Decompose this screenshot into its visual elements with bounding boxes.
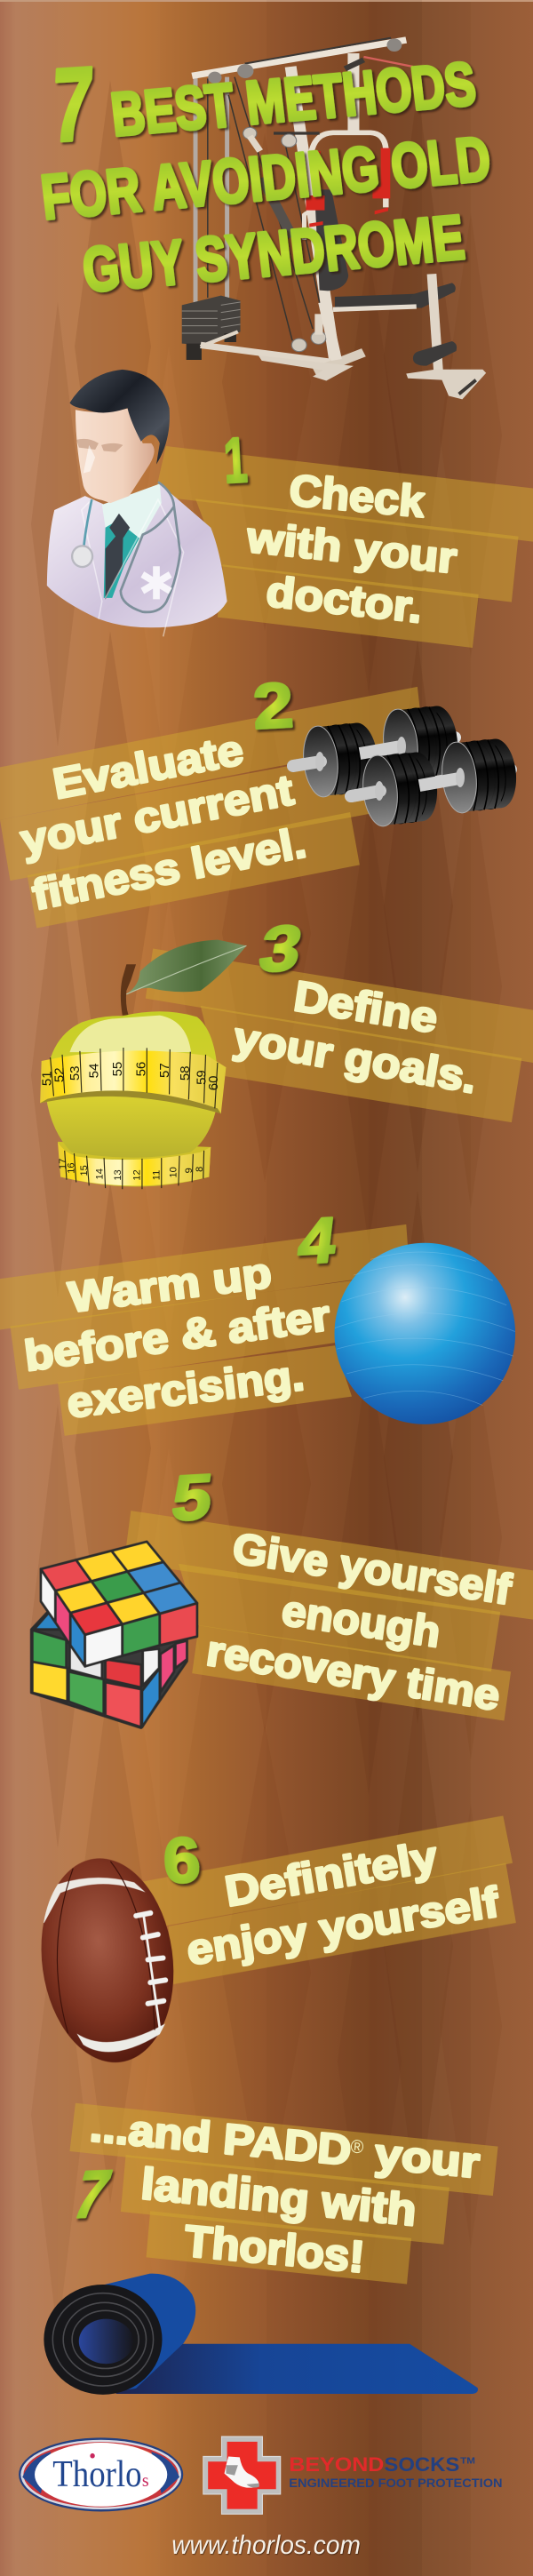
logo text: Beyond Socks: ENGINEERED FOOT PROTECTION [289,2476,503,2490]
step 4: warm up before and after exercising [0,1203,515,1436]
icon: apple with tape measure: 9 [184,1168,195,1173]
text: Evaluate your current fitness level: your current [17,766,298,865]
number 6: 6 [162,1824,202,1896]
icon: apple with tape measure: 54 [88,1064,102,1078]
logo text: Beyond Socks: SOCKS [384,2454,459,2476]
text: Define your goals: Define [290,972,441,1042]
logo: Thorlos [19,2437,183,2511]
text: and PADD your landing with Thorlos [88,2102,481,2282]
banner stripes [69,2103,498,2285]
text: Definitely enjoy yourself: Definitely [222,1832,442,1916]
number 3: 3 [254,913,307,985]
icon: apple with tape measure: 55 [111,1062,125,1076]
icon: dumbbells [293,704,520,828]
step 3: define your goals [40,913,533,1189]
icon: apple with tape measure: 57 [158,1063,172,1078]
text: Define your goals [230,972,480,1103]
number 2: 2 [251,670,295,742]
icon: apple with tape measure: 60 [207,1076,221,1090]
icon: apple with tape measure: 16 [67,1162,76,1174]
text: Check with your doctor: with your [244,514,458,583]
icon: apple with tape measure: 58 [179,1065,193,1081]
logo text: Beyond Socks: BEYOND [289,2454,384,2476]
icon: apple with tape measure: 11 [152,1170,162,1180]
icon: doctor [47,370,227,636]
icon: apple with tape measure: 8 [195,1167,205,1172]
icon: exercise ball [335,1243,515,1424]
banner stripes [155,446,533,648]
text: Check with your doctor [244,467,458,633]
number 7: 7 [66,2157,118,2232]
text: and PADD your landing with Thorlos: ...and PADD [88,2102,353,2174]
text: Evaluate your current fitness level: Evaluate [50,726,247,809]
text: and PADD your landing with Thorlos: Thorlos! [183,2216,366,2282]
text: Warm up before and after exercising: Warm up [66,1249,274,1322]
icon: rubiks cube [31,1542,197,1727]
text: Definitely enjoy yourself [184,1832,502,1974]
icon: apple with tape measure: 56 [135,1062,148,1076]
icon: apple with tape measure: 10 [169,1167,179,1177]
icon: apple with tape measure: 12 [131,1169,142,1181]
icon: apple with tape measure: 15 [79,1165,90,1176]
text: Definitely enjoy yourself: enjoy yourself [184,1878,502,1974]
footer logos [19,2436,503,2560]
icon: apple with tape measure: 14 [95,1168,106,1179]
title [37,44,494,305]
icon: apple with tape measure: 13 [113,1169,123,1181]
text: Check with your doctor: Check [288,467,427,527]
icon: rolled yoga mat [44,2274,478,2395]
icon: apple with tape measure [40,940,246,1189]
icon: apple with tape measure: 51 [41,1071,54,1086]
logo text: Beyond Socks [289,2454,503,2490]
icon: apple with tape measure: 17 [58,1159,68,1169]
number 1: 1 [222,425,249,496]
text: Warm up before and after exercising: exercising. [65,1352,306,1427]
text: and PADD your landing with Thorlos: your [373,2130,481,2187]
logo: Beyond Socks cross [203,2436,281,2514]
banner stripes [146,948,533,1122]
title number 7: 7 [50,44,95,163]
number 5: 5 [169,1461,216,1534]
icon: apple with tape measure: 59 [195,1070,209,1085]
step 1: check with your doctor [47,370,533,648]
text: Give yourself enough recovery time: recovery time [203,1627,503,1720]
text: and PADD your landing with Thorlos: landing with [139,2159,418,2236]
icon: football [29,1849,186,2071]
step 7: and PADD your landing with Thorlos [44,2102,498,2395]
website url: www.thorlos.com [171,2531,361,2560]
banner stripes [138,1815,516,1984]
text: Define your goals: your goals. [230,1014,480,1103]
logo: Thorlos: s [142,2470,149,2491]
number 4: 4 [295,1203,340,1277]
text: Give yourself enough recovery time: enough [279,1587,443,1657]
banner stripes [0,1224,410,1436]
text: and PADD your landing with Thorlos: ® [350,2136,364,2158]
banner stripes [124,1511,533,1721]
text: Evaluate your current fitness level [17,726,310,920]
step 2: evaluate your current fitness level [0,670,520,929]
text: Evaluate your current fitness level: fitness level. [28,819,310,920]
text: Give yourself enough recovery time [203,1525,514,1720]
text: Give yourself enough recovery time: Give yourself [230,1525,514,1615]
banner stripes [0,687,423,929]
text: Warm up before and after exercising [21,1249,333,1427]
icon: home gym machine [182,38,486,399]
step 5: give yourself enough recovery time [31,1461,533,1727]
icon: apple with tape measure: 52 [53,1067,67,1082]
text: Check with your doctor: doctor. [264,568,425,633]
text: Warm up before and after exercising: before & after [21,1292,333,1381]
logo: Thorlos: Thorlo [52,2452,142,2494]
logo text: Beyond Socks: TM [460,2456,475,2467]
step 6: definitely enjoy yourself [29,1815,516,2071]
icon: apple with tape measure: 53 [68,1065,83,1081]
